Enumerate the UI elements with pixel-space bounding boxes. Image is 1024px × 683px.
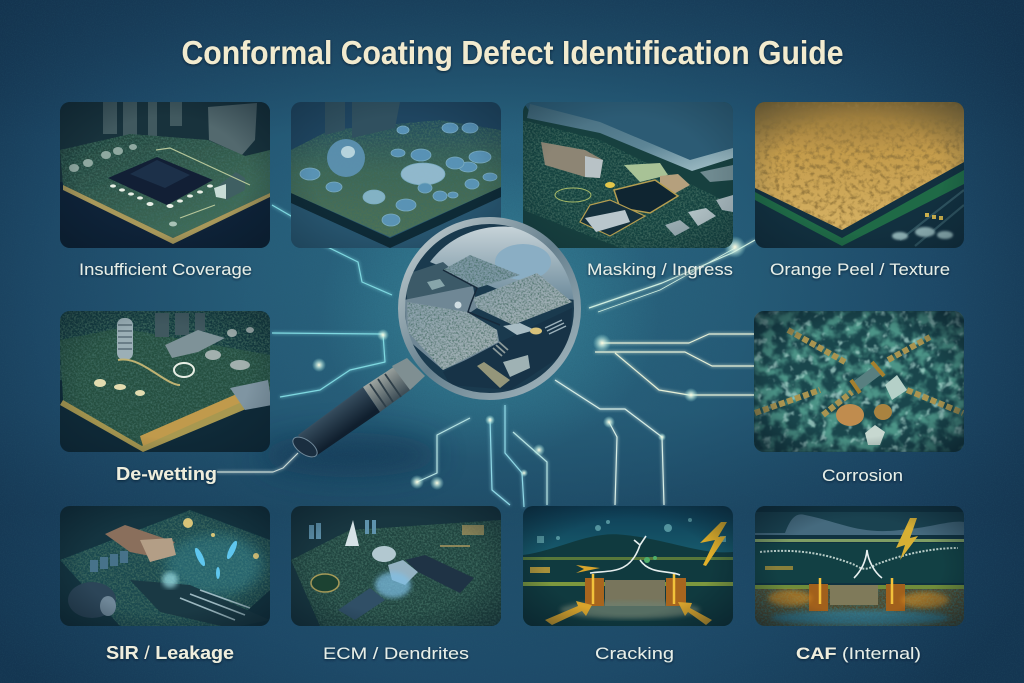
panel: corrosion — [754, 311, 964, 452]
panel: ECM dendrites — [291, 506, 501, 626]
circuit traces connecting panels to the magnifier — [217, 205, 755, 507]
panel: masking ingress — [523, 102, 733, 248]
label: SIR leakage: SIR / Leakage — [106, 643, 234, 663]
panel: SIR leakage — [60, 506, 270, 628]
label: insufficient coverage: Insufficient Coverage — [79, 260, 252, 279]
panel: insufficient coverage — [60, 102, 270, 248]
magnifier lens contents — [405, 224, 574, 393]
panel: de-wetting droplets — [291, 102, 501, 250]
labels — [79, 260, 950, 663]
label: corrosion: Corrosion — [822, 466, 903, 485]
label: masking ingress: Masking / Ingress — [587, 260, 733, 279]
magnifier handle — [290, 358, 425, 461]
magnifier ring — [402, 220, 578, 396]
label: CAF internal: CAF (Internal) — [796, 644, 921, 663]
panel: cracking — [523, 506, 733, 626]
label: orange peel: Orange Peel / Texture — [770, 260, 950, 279]
label: ECM dendrites: ECM / Dendrites — [323, 644, 469, 663]
glowing trace nodes — [302, 219, 746, 490]
label: de-wetting: De-wetting — [116, 464, 217, 484]
panel: orange peel texture — [755, 102, 964, 248]
panel: de-wetting board — [60, 311, 272, 452]
label: cracking: Cracking — [595, 644, 674, 663]
title: Conformal Coating Defect Identification Guide — [182, 34, 844, 71]
icon: magnifying glass — [290, 220, 580, 461]
panel: CAF internal — [755, 506, 964, 626]
